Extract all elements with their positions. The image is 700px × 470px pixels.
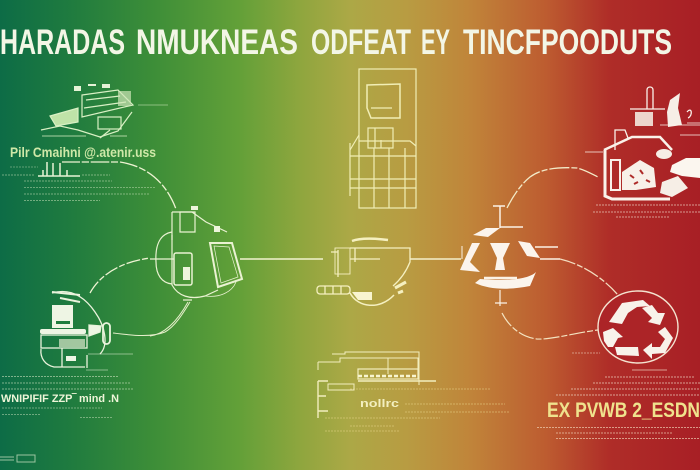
title: ODFEAT [311,23,411,62]
right central node icon [460,206,560,306]
icon: recycle symbol [598,291,678,363]
dashed connector: node bottom to recycle [502,313,598,339]
right upper text block [593,205,700,217]
dashed connector: lower-left to hub [90,258,150,293]
left upper heading: Pilr Cmaihni @.atenir.uss [10,144,156,160]
icon: top-left machine [41,84,168,138]
title: HARADAS [0,23,125,62]
right text block above heading [556,353,700,395]
curved connectors: lower-left to hub bottom [113,302,190,336]
icon: lower-left machine [40,292,133,370]
icon: top-right factory [585,87,700,199]
connector: hub to center [240,258,323,260]
title: EY [421,23,450,62]
lower-center heading: nollrc [360,398,399,410]
right text block below heading [537,428,700,438]
connector: center to right node [410,258,461,260]
footer logo [0,455,35,462]
lower-left text block [2,376,134,389]
lower-left heading: WNIPIFIF ZZP‾ mind .N [1,393,119,405]
left upper text block [2,162,155,200]
connector: top center to right node [507,168,598,208]
central-left hub icon [150,206,242,300]
lower-center text block [325,389,510,431]
dashed connector: top-left to hub [62,162,176,209]
center bowl icon [317,239,410,305]
center-top diagram [350,69,416,208]
title [0,23,672,62]
lower-left small text [2,408,112,418]
lower-center machine diagram [318,352,436,418]
title: NMUKNEAS [136,23,298,62]
dashed connector: right node to recycle [560,259,618,295]
